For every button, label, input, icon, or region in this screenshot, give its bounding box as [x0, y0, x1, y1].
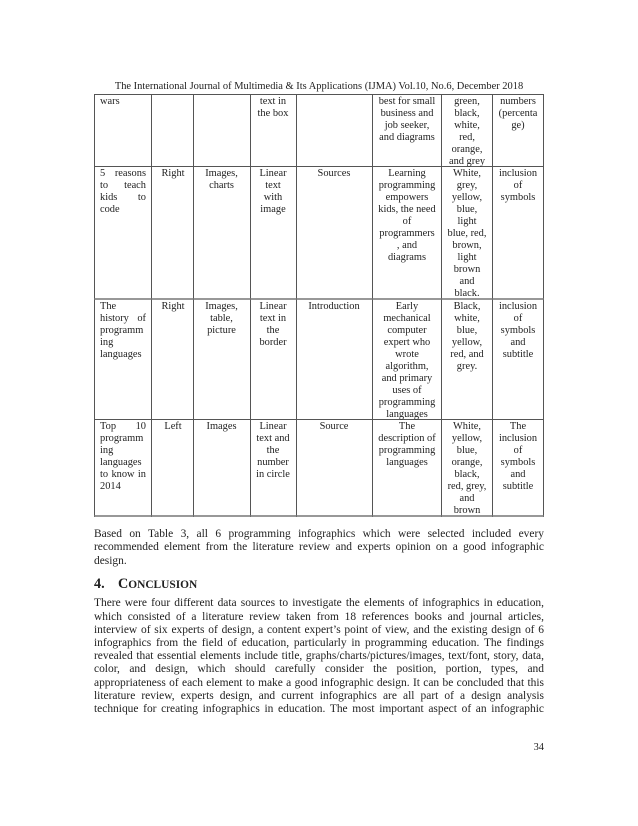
cell: colors: white,	[454, 313, 480, 324]
cell: title: to teach	[100, 180, 146, 191]
cell: text style: Linear	[259, 168, 287, 179]
cell: design	[499, 421, 537, 492]
cell: colors: brown,	[452, 240, 482, 251]
cell: story: Early	[396, 301, 418, 312]
cell: story: business and	[381, 108, 433, 119]
cell: design: symbols	[501, 325, 535, 336]
cell: text style	[256, 421, 290, 480]
cell: colors: Black,	[454, 301, 480, 312]
cell: colors: white,	[454, 120, 480, 131]
cell: colors: and	[459, 493, 474, 504]
cell: text style: text in	[260, 313, 286, 324]
cell: title: programm	[100, 325, 143, 336]
cell: title: The	[100, 301, 116, 312]
cell: story: description of	[378, 433, 436, 444]
heading: conclusion: 4.	[94, 576, 105, 592]
cell: text style: with	[264, 192, 282, 203]
paragraph: conclusion text: which consisted of a literature review taken from 18 references books and journal articles,	[94, 611, 544, 623]
cell: graphics: table,	[210, 313, 233, 324]
cell: story	[378, 96, 436, 143]
cell: text style: text and	[256, 433, 290, 444]
cell: text style	[259, 301, 287, 348]
cell: story: empowers	[386, 192, 428, 203]
cell: colors: red, grey,	[448, 481, 486, 492]
table row: 5 reasons	[100, 168, 537, 299]
cell: story	[378, 301, 436, 420]
page number: 34	[534, 742, 544, 753]
cell: colors: blue,	[457, 325, 477, 336]
cell: title: wars	[100, 96, 120, 107]
cell: text style: border	[259, 337, 287, 348]
cell: colors: White,	[453, 421, 481, 432]
cell: text style: Linear	[259, 421, 287, 432]
paragraph: conclusion text: literature review, experts design, and current infographics are all part of a design analysis	[94, 690, 544, 702]
cell: colors: black,	[454, 469, 480, 480]
paragraph: conclusion text: color, and design, which should carefully consider the position, portion, types, and	[94, 663, 544, 675]
cell: story: , and	[397, 240, 417, 251]
cell: story: expert who	[384, 337, 430, 348]
cell: text style	[258, 96, 288, 119]
paragraph: table summary	[94, 528, 544, 566]
cell: colors: and grey	[449, 156, 485, 167]
cell: data: Introduction	[308, 301, 360, 312]
cell: colors: and	[459, 276, 474, 287]
cell: title	[100, 168, 146, 215]
paragraph: table summary: design.	[94, 554, 127, 566]
cell: text style: the	[267, 325, 279, 336]
cell: story: diagrams	[388, 252, 426, 263]
cell: story: kids, the need	[378, 204, 436, 215]
cell: colors: yellow,	[452, 433, 482, 444]
cell: colors: yellow,	[452, 192, 482, 203]
cell: colors: White,	[453, 168, 481, 179]
cell: title: ing	[100, 445, 113, 456]
cell: colors: brown	[454, 264, 480, 275]
cell: position: Right	[161, 301, 185, 312]
cell: story: programmers	[379, 228, 435, 239]
cell: colors: blue,	[457, 204, 477, 215]
cell: colors: red,	[459, 132, 475, 143]
cell: position: Left	[164, 421, 182, 432]
cell: story	[378, 421, 436, 468]
cell: story: languages	[386, 457, 428, 468]
cell: colors	[448, 421, 486, 516]
cell: graphics	[205, 168, 238, 191]
cell: graphics: Images	[206, 421, 236, 432]
cell: story: programming	[379, 180, 435, 191]
cell: story: Learning	[388, 168, 426, 179]
cell: story: computer	[387, 325, 427, 336]
cell: graphics: Images,	[205, 168, 238, 179]
cell: colors: orange,	[452, 144, 482, 155]
cell: graphics: Images,	[205, 301, 238, 312]
cell: story: of	[403, 216, 411, 227]
cell: colors: yellow,	[452, 337, 482, 348]
cell: story: wrote	[395, 349, 419, 360]
cell: story: algorithm,	[386, 361, 428, 372]
heading: conclusion: CONCLUSION	[118, 576, 197, 592]
cell: story: and diagrams	[379, 132, 435, 143]
cell: title: history of	[100, 313, 146, 324]
cell: text style: image	[260, 204, 286, 215]
cell: text style: Linear	[259, 301, 287, 312]
cell: story: programming	[379, 445, 435, 456]
paragraph: table summary: Based on Table 3, all 6 programming infographics which were selected included every	[94, 528, 544, 540]
cell: design: symbols	[501, 457, 535, 468]
paragraph: conclusion text: infographics from the field of education, particularly in programming education. The findings	[94, 637, 544, 649]
cell: design: ge)	[511, 120, 525, 131]
cell: title: kids to	[100, 192, 146, 203]
paragraph: table summary: recommended element from the literature review and experts opinion on a good infographic	[94, 541, 544, 553]
cell: story: The	[399, 421, 415, 432]
cell: title: 2014	[100, 481, 121, 492]
cell: story: languages	[386, 409, 428, 420]
cell: design: subtitle	[503, 349, 533, 360]
cell: colors: black.	[454, 288, 480, 299]
cell: colors: orange,	[452, 457, 482, 468]
paragraph: conclusion text	[94, 597, 544, 715]
running header: The International Journal of Multimedia & Its Applications (IJMA) Vol.10, No.6, December 2018	[115, 81, 523, 92]
cell: design: inclusion	[499, 168, 537, 179]
cell: data: Source	[320, 421, 348, 432]
cell: design: subtitle	[503, 481, 533, 492]
paragraph: conclusion text: There were four different data sources to investigate the elements of infographics in education,	[94, 597, 544, 609]
cell: text style: the box	[258, 108, 288, 119]
cell: colors: light	[457, 216, 477, 227]
cell: colors: red, and	[450, 349, 484, 360]
cell: colors: brown	[454, 505, 480, 516]
cell: colors	[450, 301, 484, 372]
paragraph: conclusion text: interview of six experts of design, a content expert’s point of view, and the existing design of 6	[94, 624, 544, 636]
cell: title: languages	[100, 457, 142, 468]
cell: title: programm	[100, 433, 143, 444]
cell: design: and	[510, 337, 526, 348]
cell: design: inclusion	[499, 433, 537, 444]
cell: design: inclusion	[499, 301, 537, 312]
table row: history	[100, 301, 537, 420]
cell: colors: green,	[454, 96, 480, 107]
cell: story: best for small	[379, 96, 435, 107]
cell: title: Top 10	[100, 421, 146, 432]
cell: design: (percenta	[499, 108, 537, 119]
cell: design	[499, 96, 538, 131]
cell: graphics: charts	[209, 180, 234, 191]
paragraph: conclusion text: revealed that essential elements include title, graphs/charts/pictures/images, text/font, story, data,	[94, 650, 544, 662]
paragraph: conclusion text: technique for creating infographics in education. The most important aspect of an infographic	[94, 703, 544, 715]
cell: colors: blue,	[457, 445, 477, 456]
cell: design: of	[514, 180, 522, 191]
cell: title: to know in	[100, 469, 146, 480]
cell: text style: in circle	[256, 469, 290, 480]
cell: data: Sources	[318, 168, 350, 179]
table row: wars	[100, 96, 538, 167]
cell: graphics: picture	[207, 325, 236, 336]
cell: text style: the	[267, 445, 279, 456]
cell: title: 5 reasons	[100, 168, 146, 179]
cell: text style: number	[257, 457, 289, 468]
cell: design: and	[510, 469, 526, 480]
cell: design: numbers	[500, 96, 536, 107]
cell: design: symbols	[501, 192, 535, 203]
cell: title: code	[100, 204, 120, 215]
cell: text style	[259, 168, 287, 215]
cell: colors: black,	[454, 108, 480, 119]
cell: colors: grey.	[457, 361, 477, 372]
cell: title	[100, 421, 146, 492]
cell: colors: light	[457, 252, 477, 263]
cell: title: ing	[100, 337, 113, 348]
cell: story: programming	[379, 397, 435, 408]
cell: graphics	[205, 301, 238, 336]
cell: story: job seeker,	[385, 120, 429, 131]
cell: design	[499, 301, 537, 360]
cell: story: uses of	[392, 385, 422, 396]
cell: design	[499, 168, 537, 203]
cell: colors: blue, red,	[448, 228, 486, 239]
cell: title: languages	[100, 349, 142, 360]
cell: design: of	[514, 313, 522, 324]
cell: colors	[448, 168, 486, 299]
cell: colors	[449, 96, 485, 167]
paragraph: conclusion text: appropriateness of each element to make a good infographic design. It can be concluded that this	[94, 677, 544, 689]
cell: story: and primary	[382, 373, 432, 384]
cell: design: The	[510, 421, 526, 432]
cell: position: Right	[161, 168, 185, 179]
cell: design: of	[514, 445, 522, 456]
cell: colors: grey,	[457, 180, 477, 191]
table	[94, 94, 544, 517]
cell: story	[378, 168, 436, 263]
table row: top 10	[100, 421, 537, 516]
cell: story: mechanical	[383, 313, 431, 324]
cell: text style: text in	[260, 96, 286, 107]
cell: title	[100, 301, 146, 360]
cell: text style: text	[265, 180, 281, 191]
